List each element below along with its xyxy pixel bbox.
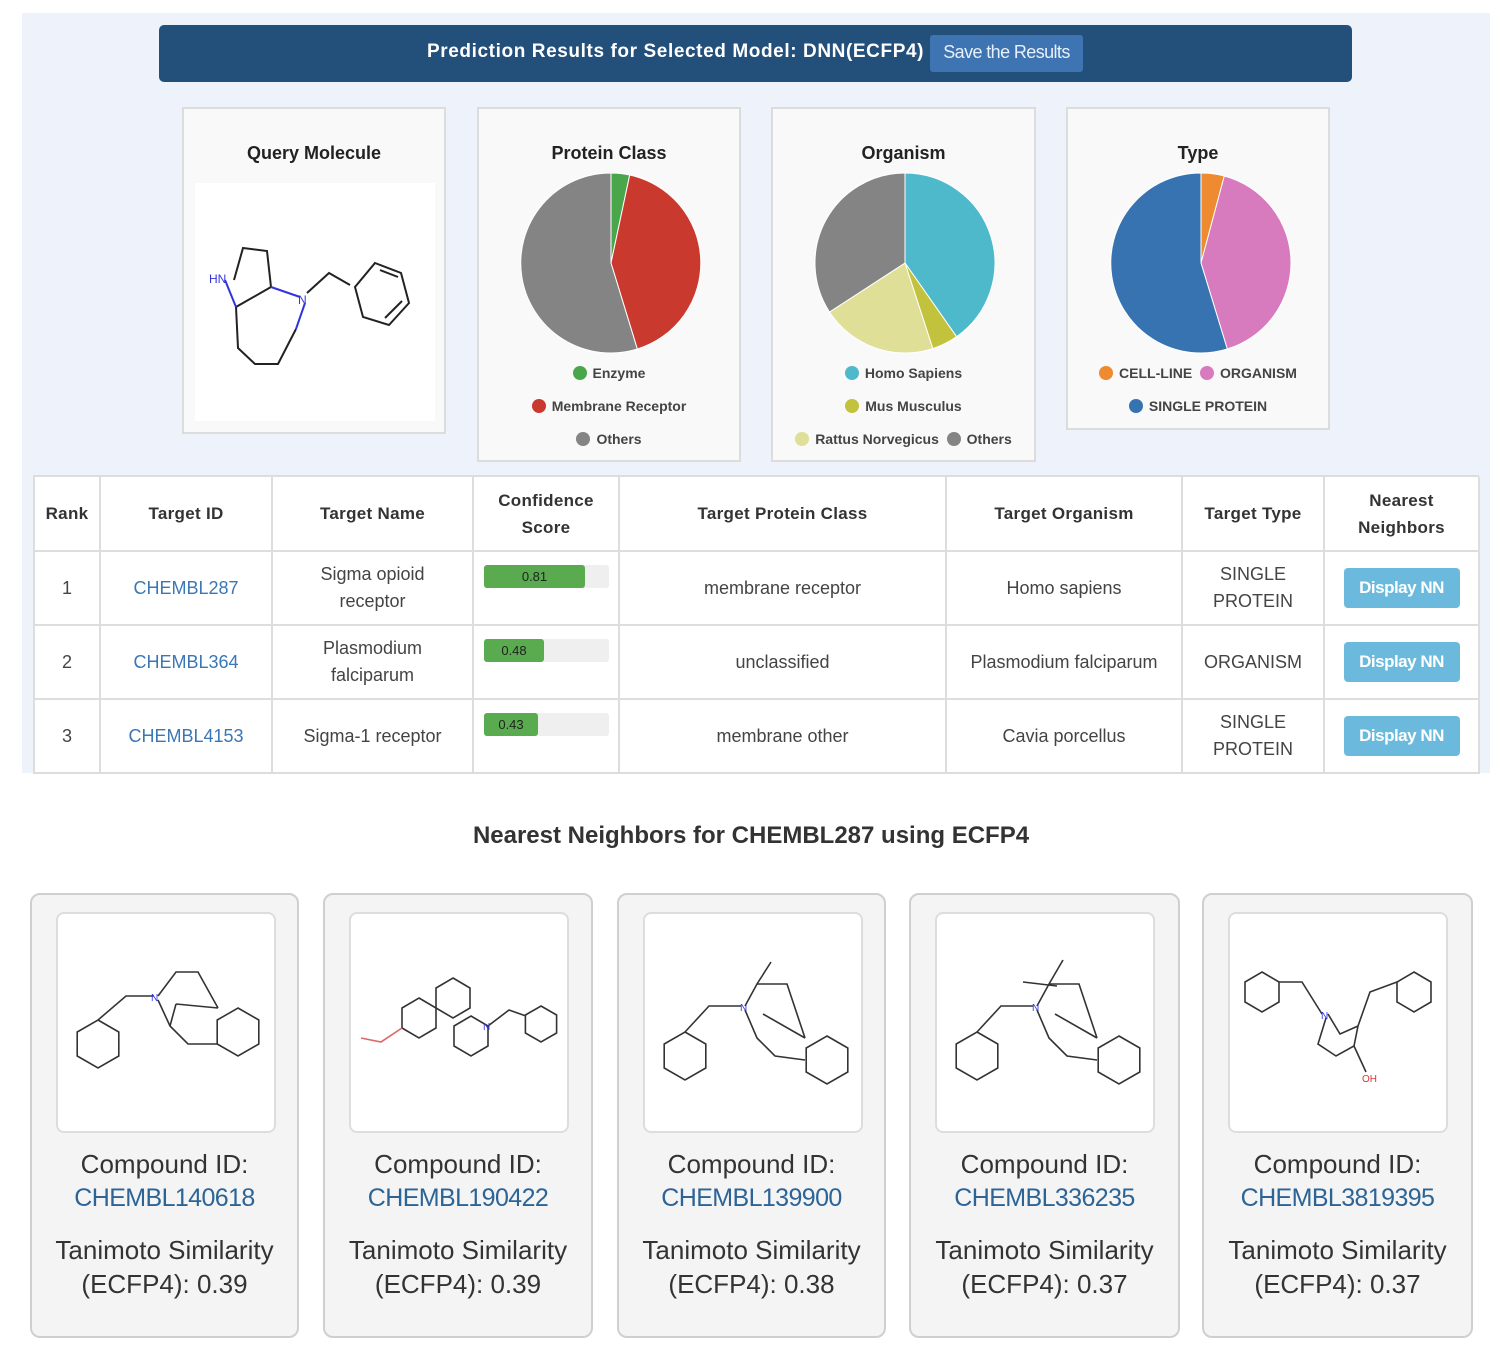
results table: Nearest bbox=[1369, 490, 1434, 510]
card 4 bbox=[909, 893, 1180, 1338]
card 4: (ECFP4): 0.37 bbox=[961, 1269, 1128, 1299]
panel: organism: Mus Musculus bbox=[865, 398, 962, 414]
results table: SINGLE bbox=[1220, 564, 1286, 584]
header row: Rank bbox=[46, 504, 88, 523]
molecule image: N bbox=[483, 1022, 490, 1033]
pie chart bbox=[816, 174, 995, 352]
molecule image bbox=[349, 912, 569, 1133]
results table: Sigma opioid bbox=[320, 564, 425, 584]
legend: Homo Sapiens bbox=[865, 365, 962, 381]
molecule image bbox=[56, 912, 276, 1133]
molecule image bbox=[643, 912, 863, 1133]
row 2: 2 bbox=[62, 652, 72, 672]
header bar bbox=[159, 25, 1352, 82]
results table: Plasmodium falciparum bbox=[970, 652, 1158, 672]
legend: Enzyme bbox=[593, 365, 645, 381]
row 3: 3 bbox=[62, 726, 72, 746]
results table: ORGANISM bbox=[1204, 652, 1302, 672]
results table: CHEMBL4153 bbox=[128, 726, 244, 746]
heading: Protein Class bbox=[551, 143, 667, 163]
card 5 bbox=[1202, 893, 1473, 1338]
background area bbox=[22, 13, 1490, 773]
compound text: Compound ID: bbox=[1254, 1149, 1421, 1179]
card 3: Tanimoto Similarity bbox=[642, 1235, 861, 1265]
results table: Plasmodium bbox=[323, 638, 422, 658]
results table: Sigma-1 receptor bbox=[303, 726, 442, 746]
nearest neighbors heading: Nearest Neighbors for CHEMBL287 using ECFP4 bbox=[473, 822, 1029, 849]
compound text: Compound ID: bbox=[81, 1149, 248, 1179]
heading: Type bbox=[1178, 143, 1218, 163]
heading: Organism bbox=[861, 143, 946, 163]
card 2: Tanimoto Similarity bbox=[349, 1235, 567, 1265]
results table: Display NN bbox=[1359, 726, 1444, 745]
card 5: CHEMBL3819395 bbox=[1241, 1184, 1434, 1212]
molecule image bbox=[209, 246, 410, 365]
results table: CHEMBL364 bbox=[133, 652, 239, 672]
card 2: CHEMBL190422 bbox=[368, 1184, 548, 1212]
molecule image bbox=[1228, 912, 1448, 1133]
panel: organism: Rattus Norvegicus Others bbox=[815, 431, 1012, 447]
pie chart bbox=[1111, 174, 1290, 352]
molecule image: HN bbox=[209, 272, 226, 286]
results table: PROTEIN bbox=[1213, 739, 1293, 759]
pie chart bbox=[521, 174, 700, 352]
compound text: Compound ID: bbox=[374, 1149, 542, 1179]
results table: 0.43 bbox=[498, 717, 524, 732]
heading: Query Molecule bbox=[247, 143, 381, 163]
panel: type bbox=[1066, 107, 1330, 430]
panel: type: SINGLE PROTEIN bbox=[1149, 398, 1267, 414]
row 1 bbox=[35, 552, 101, 626]
card 3: (ECFP4): 0.38 bbox=[668, 1269, 835, 1299]
card 1: Tanimoto Similarity bbox=[55, 1235, 274, 1265]
results table: Target Organism bbox=[994, 504, 1134, 523]
card 5: (ECFP4): 0.37 bbox=[1254, 1269, 1421, 1299]
save button: Save the Results bbox=[943, 42, 1070, 62]
molecule image: OH bbox=[1362, 1074, 1377, 1085]
molecule image: N bbox=[1321, 1011, 1328, 1022]
molecule image: N bbox=[151, 993, 158, 1004]
card 4: CHEMBL336235 bbox=[954, 1184, 1135, 1212]
results table: 0.48 bbox=[501, 643, 527, 658]
results table: Neighbors bbox=[1358, 518, 1445, 536]
results table: membrane other bbox=[716, 726, 849, 746]
panel: organism bbox=[771, 107, 1036, 462]
legend: CELL-LINE ORGANISM bbox=[1119, 365, 1297, 381]
compound text: Compound ID: bbox=[961, 1149, 1128, 1179]
card 3: CHEMBL139900 bbox=[661, 1184, 842, 1212]
card 1 bbox=[30, 893, 299, 1338]
molecule image: N bbox=[298, 293, 307, 307]
row 1: 1 bbox=[62, 578, 72, 598]
molecule image: N bbox=[740, 1003, 747, 1014]
panel: query molecule bbox=[182, 107, 446, 434]
results table: 0.81 bbox=[522, 569, 547, 584]
row 3 bbox=[35, 700, 101, 774]
header row bbox=[35, 477, 101, 552]
card 1: (ECFP4): 0.39 bbox=[81, 1269, 248, 1299]
results table: PROTEIN bbox=[1213, 591, 1293, 611]
card 1: CHEMBL140618 bbox=[74, 1184, 255, 1212]
card 2: (ECFP4): 0.39 bbox=[375, 1269, 541, 1299]
results table: Display NN bbox=[1359, 652, 1444, 671]
card 5: Tanimoto Similarity bbox=[1228, 1235, 1447, 1265]
panel: protein class bbox=[477, 107, 741, 462]
results table: Score bbox=[522, 518, 570, 536]
results table: Display NN bbox=[1359, 578, 1444, 597]
panel: protein class: Others bbox=[596, 431, 642, 447]
results table: SINGLE bbox=[1220, 712, 1286, 732]
results table: falciparum bbox=[331, 665, 414, 685]
results table: Target Protein Class bbox=[697, 504, 868, 523]
results table: Target ID bbox=[148, 504, 224, 523]
results table: membrane receptor bbox=[704, 578, 861, 598]
results table: Target Type bbox=[1204, 504, 1302, 523]
molecule image bbox=[935, 912, 1155, 1133]
results table bbox=[33, 475, 1479, 774]
results table: receptor bbox=[339, 591, 406, 611]
results table: Target Name bbox=[320, 504, 425, 523]
results table: Homo sapiens bbox=[1006, 578, 1122, 598]
panel: protein class: Membrane Receptor bbox=[552, 398, 686, 414]
card 3 bbox=[617, 893, 886, 1338]
row 2 bbox=[35, 626, 101, 700]
save button bbox=[930, 35, 1083, 72]
results table: CHEMBL287 bbox=[133, 578, 239, 598]
card 4: Tanimoto Similarity bbox=[935, 1235, 1154, 1265]
card 2 bbox=[323, 893, 593, 1338]
molecule image: N bbox=[1032, 1003, 1039, 1014]
compound text: Compound ID: bbox=[668, 1149, 835, 1179]
results table: unclassified bbox=[735, 652, 830, 672]
results table: Confidence bbox=[498, 490, 594, 510]
results table: Cavia porcellus bbox=[1002, 726, 1126, 746]
header title: Prediction Results for Selected Model: DNN(ECFP4) bbox=[427, 41, 924, 62]
